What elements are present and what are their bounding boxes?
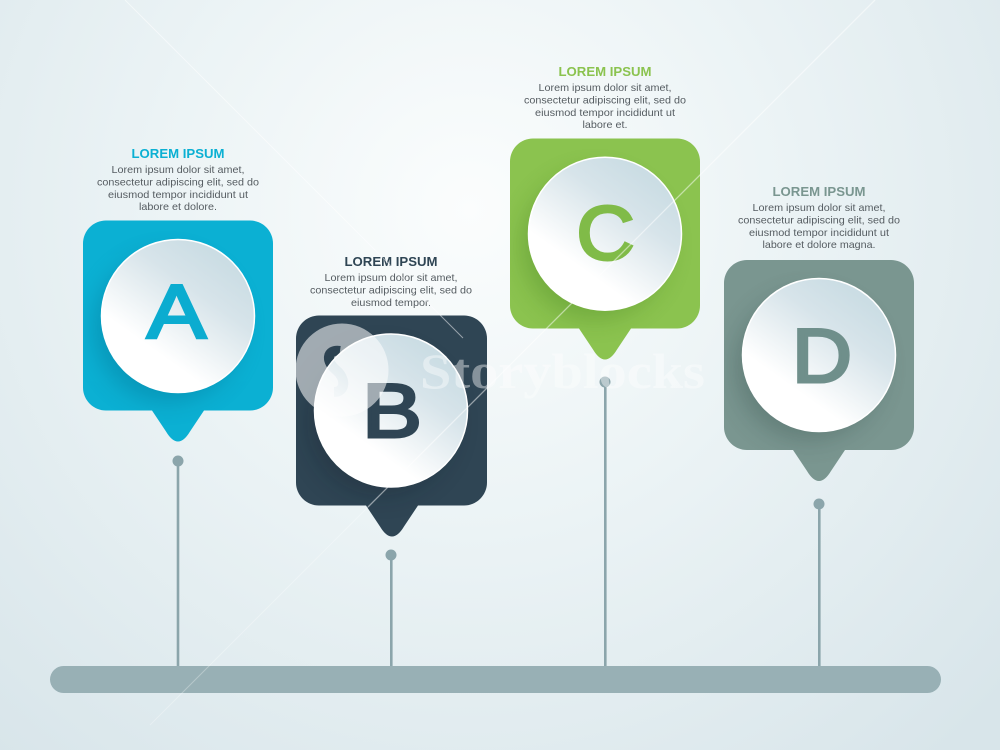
text block: D: eiusmod tempor incididunt ut: [749, 227, 889, 239]
card: B: [296, 316, 487, 536]
connector: C: [600, 376, 610, 666]
letter: B: B: [362, 369, 422, 454]
letter: C: C: [576, 192, 634, 276]
text block: A: Lorem ipsum dolor sit amet,: [112, 164, 244, 176]
text block: A: labore et dolore.: [139, 201, 217, 213]
text block: B: Lorem ipsum dolor sit amet,: [324, 272, 458, 284]
text block: C: labore et.: [582, 119, 628, 131]
text block: D: Lorem ipsum dolor sit amet,: [752, 202, 886, 214]
connector: A: [172, 456, 184, 666]
text block: B: consectetur adipiscing elit, sed do: [310, 284, 472, 296]
text block: B: eiusmod tempor.: [351, 297, 431, 309]
timeline bar: [50, 666, 941, 693]
text block: A: [97, 164, 259, 213]
heading: B: LOREM IPSUM: [344, 254, 438, 269]
card: C: [510, 138, 700, 360]
text block: C: [524, 82, 686, 131]
watermark: Storyblocks: [420, 343, 705, 399]
text block: D: [738, 202, 900, 251]
text block: A: eiusmod tempor incididunt ut: [108, 189, 248, 201]
letter: D: D: [792, 314, 852, 399]
text block: D: consectetur adipiscing elit, sed do: [738, 214, 900, 226]
watermark: [125, 0, 875, 725]
text block: A: consectetur adipiscing elit, sed do: [97, 176, 259, 188]
card: A: [83, 220, 273, 442]
heading: D: LOREM IPSUM: [772, 184, 866, 199]
text block: C: consectetur adipiscing elit, sed do: [524, 94, 686, 106]
panel: A: [83, 146, 273, 666]
text block: D: labore et dolore magna.: [762, 239, 876, 251]
panel: D: [724, 184, 914, 666]
connector: B: [386, 550, 396, 666]
panel: C: [510, 64, 700, 666]
text block: C: Lorem ipsum dolor sit amet,: [538, 82, 672, 94]
heading: A: LOREM IPSUM: [132, 146, 224, 161]
panel: B: [296, 254, 487, 666]
text block: B: [310, 272, 472, 309]
text block: C: eiusmod tempor incididunt ut: [535, 107, 675, 119]
heading: C: LOREM IPSUM: [558, 64, 652, 79]
card: D: [724, 260, 914, 481]
connector: D: [814, 498, 824, 666]
letter: A: A: [147, 270, 206, 355]
